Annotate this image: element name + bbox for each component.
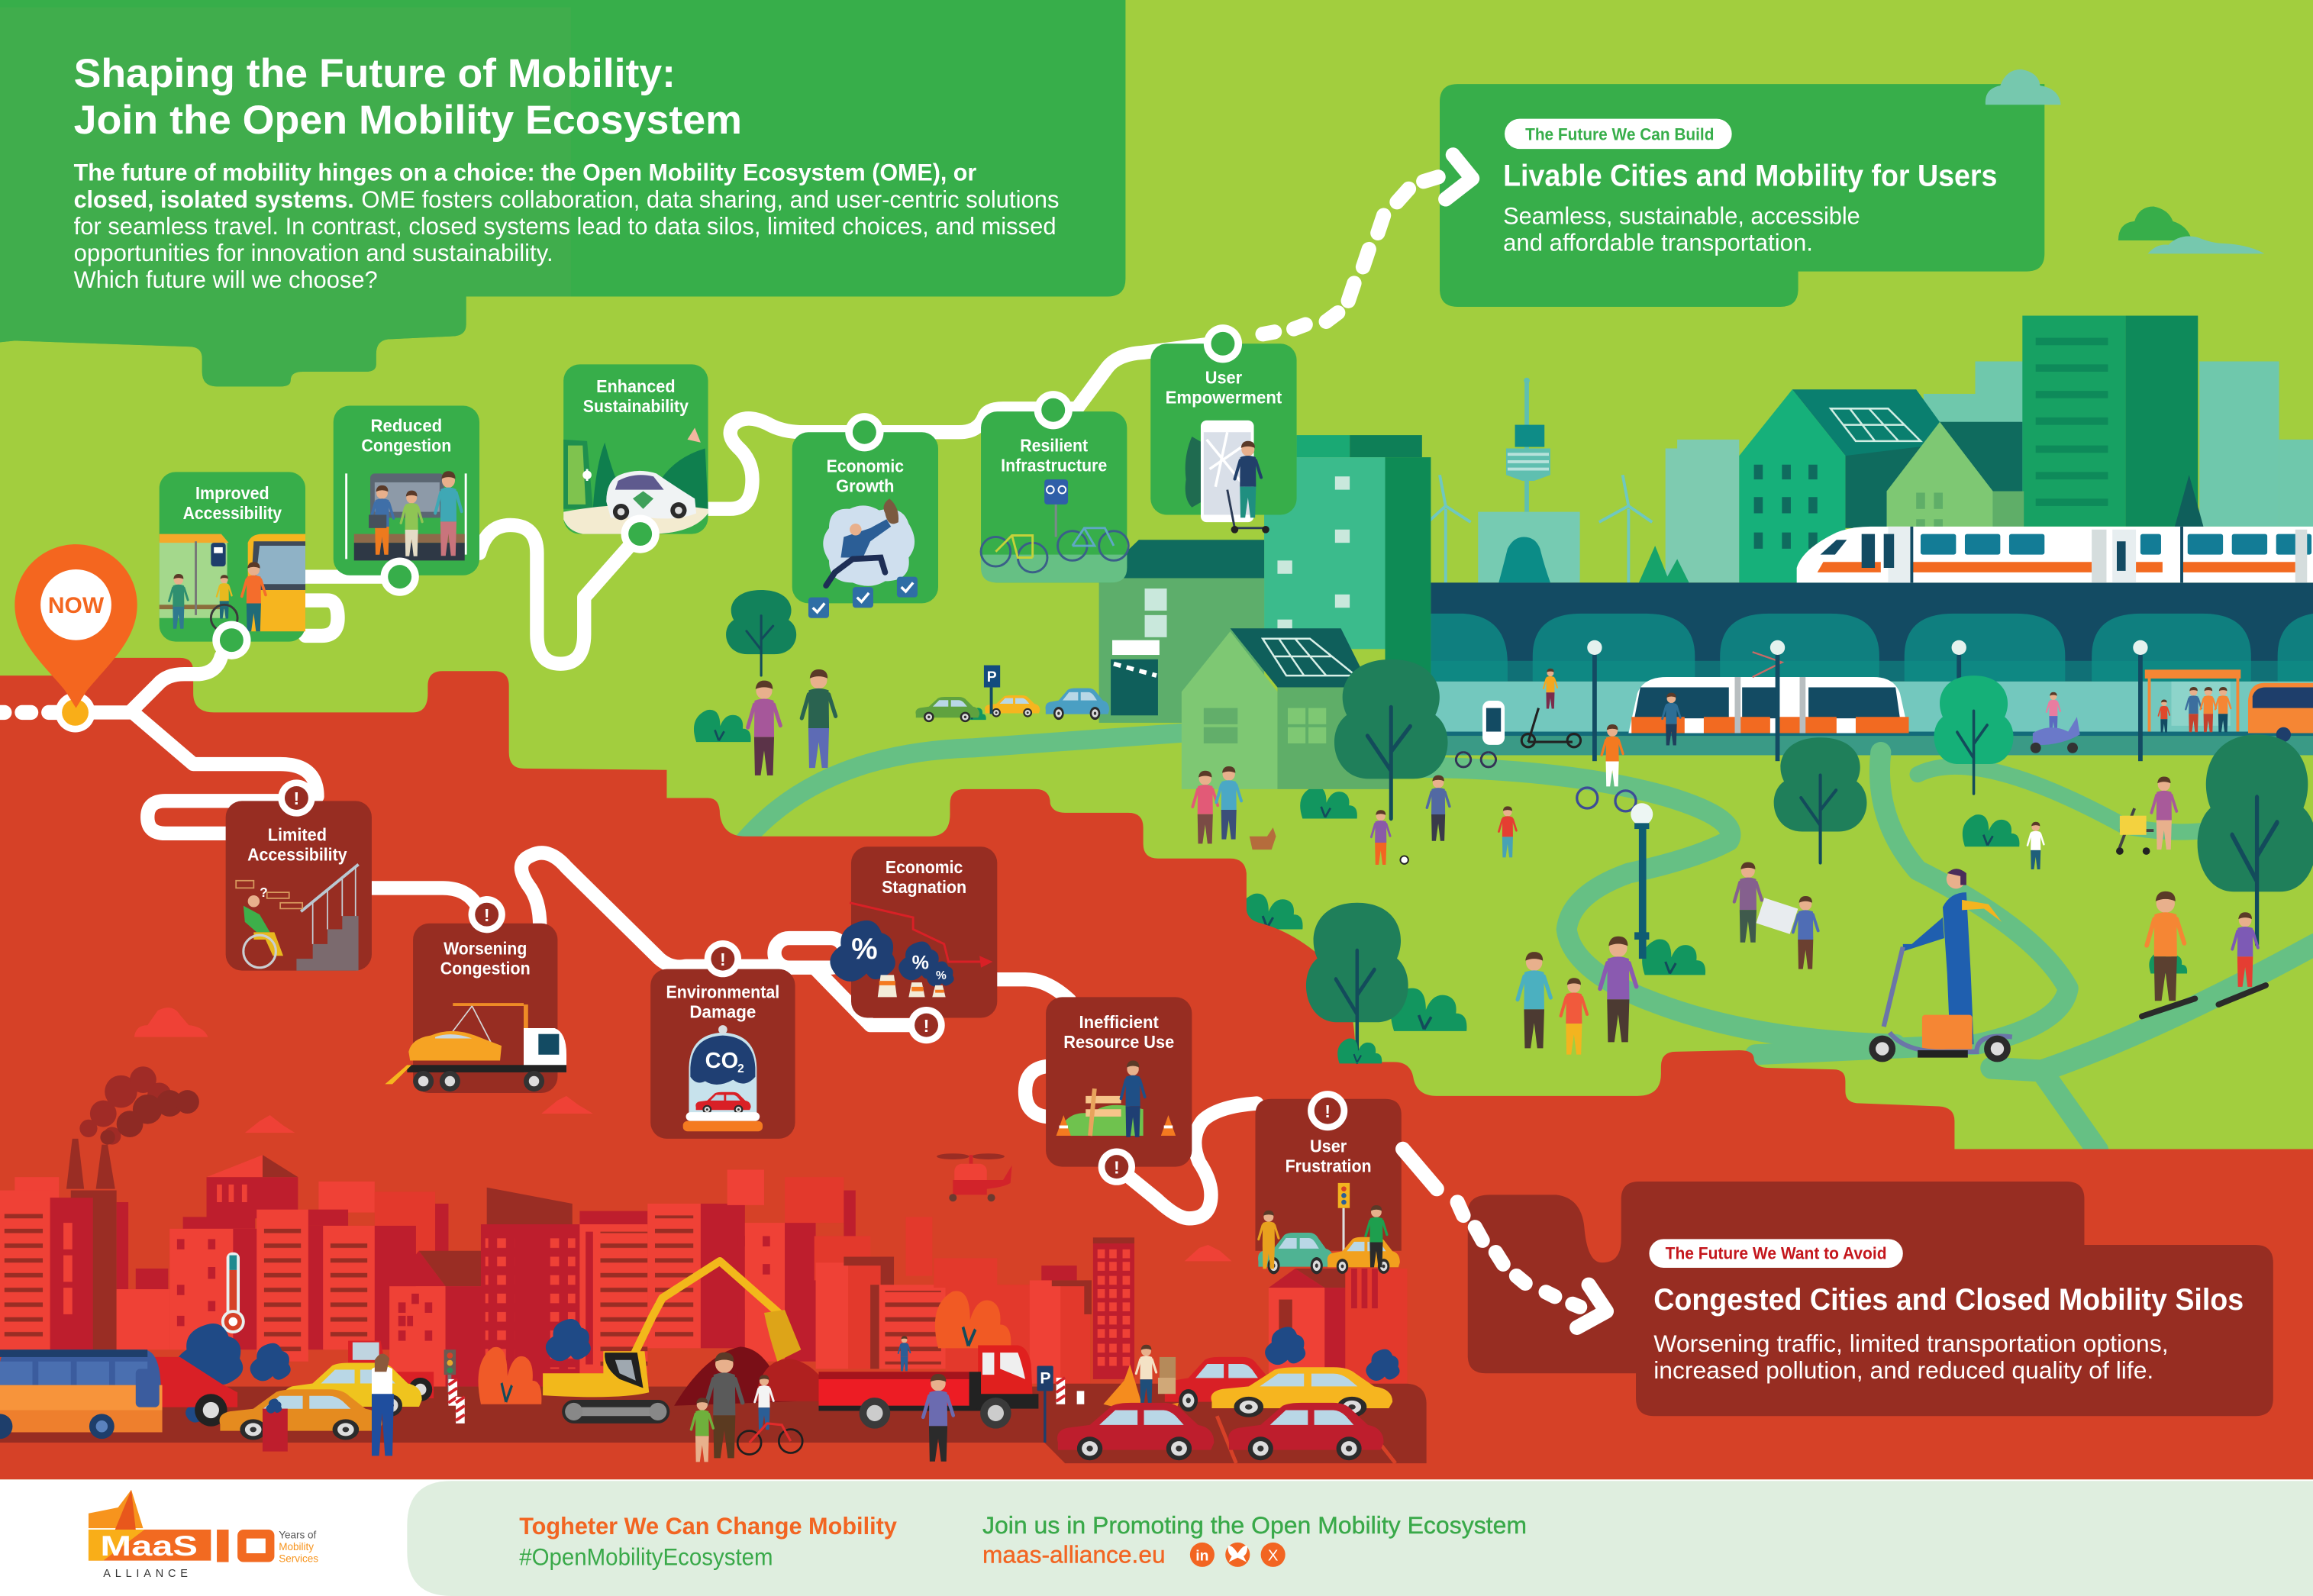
logo: MaaS Alliance 10 years: ALLIANCE	[103, 1568, 192, 1580]
intro paragraph: The future of mobility hinges on a choice: the Open Mobility Ecosystem (OME), or	[74, 159, 976, 186]
panel: User Empowerment: User	[1205, 367, 1242, 387]
panel: User Frustration: User	[1310, 1136, 1347, 1156]
panel: Economic Stagnation: %	[912, 953, 929, 974]
red future markers: !	[484, 905, 490, 925]
street tram	[1628, 652, 1909, 733]
intro paragraph: closed, isolated systems.	[74, 185, 354, 213]
panel: Environmental Damage: Environmental	[666, 982, 779, 1001]
panel: Environmental Damage	[650, 969, 795, 1139]
heading: Join the Open Mobility Ecosystem	[74, 98, 742, 143]
tree overlapping red edge	[1306, 903, 1408, 1063]
callout: future we can build: Seamless, sustainable, accessible	[1503, 202, 1860, 230]
panel: User Empowerment: Empowerment	[1166, 388, 1282, 408]
red future markers: !	[720, 950, 726, 969]
panel: Environmental Damage: Damage	[689, 1001, 756, 1021]
callout: future we want to avoid: Worsening traffic, limited transportation options,	[1653, 1330, 2169, 1357]
panel: Inefficient Resource Use	[1046, 997, 1192, 1167]
logo: MaaS Alliance 10 years	[89, 1490, 318, 1580]
panel: Worsening Congestion: Congestion	[440, 958, 531, 978]
panel: Enhanced Sustainability: Enhanced	[596, 376, 676, 396]
green future markers	[212, 324, 1242, 659]
main road, green future	[76, 342, 1223, 712]
NOW location pin	[15, 544, 137, 733]
logo: MaaS Alliance 10 years: Mobility	[279, 1541, 314, 1552]
parking sign and barricades	[1037, 1366, 1084, 1443]
callout: future we can build: and affordable transportation.	[1503, 229, 1813, 256]
panel: Improved Accessibility: Improved	[195, 483, 269, 503]
park people	[748, 669, 2266, 1055]
panel: Worsening Congestion: Worsening	[444, 938, 527, 958]
panel: Economic Growth: Economic	[827, 456, 904, 476]
dashed arrow to the future we want to avoid	[1403, 1149, 1606, 1327]
dashes left of NOW	[0, 708, 56, 716]
panel: Resilient Infrastructure: Infrastructure	[1001, 455, 1107, 475]
NOW location pin: NOW	[48, 593, 105, 618]
panel: Economic Stagnation	[830, 846, 997, 1017]
icon: social links	[1190, 1543, 1286, 1567]
parking sign and barricades: P	[1040, 1369, 1051, 1388]
park paths	[742, 733, 2313, 1150]
elevated train	[1797, 527, 2313, 582]
thermometer	[221, 1253, 245, 1333]
logo: MaaS Alliance 10 years: MaaS	[100, 1530, 198, 1562]
panel: Inefficient Resource Use: Resource Use	[1063, 1032, 1174, 1052]
street riders	[1456, 669, 2080, 811]
panel: User Frustration: Frustration	[1286, 1156, 1372, 1175]
traffic vehicles left	[0, 1324, 465, 1456]
panel: Reduced Congestion: Reduced	[371, 415, 442, 435]
panel: Improved Accessibility: Accessibility	[183, 503, 282, 523]
panel: Reduced Congestion: Congestion	[361, 435, 451, 455]
clouds around green callout	[1986, 69, 2264, 253]
red future markers: !	[1324, 1101, 1331, 1121]
intro paragraph: for seamless travel. In contrast, closed systems lead to data silos, limited choices, and missed	[74, 212, 1056, 240]
footer call to action: maas-alliance.eu	[982, 1541, 1166, 1569]
lamp posts along street	[1587, 640, 2148, 761]
intro paragraph	[74, 159, 1059, 293]
panel: Economic Growth: Growth	[836, 476, 895, 495]
green city skyline	[1428, 316, 2313, 582]
traffic cars right	[1057, 1327, 1400, 1460]
callout: future we want to avoid: Congested Cities and Closed Mobility Silos	[1653, 1283, 2244, 1317]
footer call to action	[982, 1511, 1527, 1569]
header green panel shape	[0, 0, 1125, 386]
dashed arrow to the future we can build	[1263, 155, 1473, 334]
logo: MaaS Alliance 10 years: Years of	[279, 1530, 317, 1541]
red future markers	[278, 779, 1347, 1185]
heading: Shaping the Future of Mobility:	[74, 51, 676, 96]
red future markers: !	[1114, 1157, 1120, 1177]
factory chimneys	[66, 1139, 115, 1189]
footer band	[0, 1479, 2313, 1596]
green apartment and houses	[1099, 435, 1431, 789]
car park barrier and cars: P	[987, 669, 997, 685]
panel: Worsening Congestion	[385, 924, 566, 1093]
panel: Reduced Congestion	[334, 405, 479, 576]
icon: social links: X	[1268, 1548, 1279, 1565]
panel: Limited Accessibility: Limited	[268, 825, 327, 845]
park trees and bushes	[694, 590, 2313, 1031]
viaduct with arches	[1431, 582, 2313, 755]
callout: future we can build: The Future We Can Build	[1525, 125, 1714, 144]
intro paragraph: OME fosters collaboration, data sharing, and user-centric solutions	[361, 185, 1059, 213]
red future markers: !	[294, 788, 299, 808]
footer call to action: Join us in Promoting the Open Mobility Ecosystem	[982, 1511, 1527, 1539]
main road, red future	[133, 712, 1257, 1218]
pedestrians on road	[691, 1353, 953, 1462]
intro paragraph: Which future will we choose?	[74, 266, 378, 293]
panel: Limited Accessibility: ?	[260, 885, 268, 900]
panel: Environmental Damage: 2	[737, 1062, 744, 1075]
footer tagline	[519, 1512, 897, 1570]
smog clouds and small clouds	[79, 1008, 1232, 1261]
panel: Resilient Infrastructure: Resilient	[1020, 435, 1089, 455]
heading	[74, 51, 742, 143]
footer tagline: #OpenMobilityEcosystem	[519, 1543, 773, 1570]
red city skyline	[0, 1155, 1408, 1387]
helicopter	[937, 1153, 1012, 1201]
car park barrier and cars	[915, 640, 1160, 722]
footer tagline: Togheter We Can Change Mobility	[519, 1512, 897, 1540]
panel: Economic Stagnation: %	[851, 933, 878, 966]
park lamp	[1631, 803, 1653, 959]
panel: Inefficient Resource Use: Inefficient	[1079, 1012, 1159, 1032]
panel: User Frustration	[1255, 1099, 1402, 1274]
panel: Limited Accessibility	[226, 801, 372, 971]
red lower territory	[0, 658, 2313, 1479]
bus shelter and bus	[2145, 669, 2313, 742]
man on electric scooter	[1869, 869, 2012, 1062]
road ground	[0, 1384, 1427, 1463]
callout: future we want to avoid: increased pollution, and reduced quality of life.	[1653, 1356, 2153, 1384]
panel: Economic Stagnation: Stagnation	[882, 877, 966, 897]
tree in front of houses	[1334, 659, 1448, 819]
red future markers: !	[924, 1016, 929, 1036]
panel: Economic Stagnation: Economic	[886, 857, 963, 877]
callout: future we want to avoid	[1468, 1182, 2273, 1416]
excavator, mound and truck	[478, 1261, 1038, 1429]
callout: future we can build	[1440, 84, 2044, 307]
panel: Environmental Damage: CO	[705, 1049, 738, 1073]
panel: User Empowerment	[1150, 343, 1297, 534]
callout: future we want to avoid: The Future We Want to Avoid	[1666, 1243, 1887, 1262]
panel: Improved Accessibility	[160, 472, 305, 642]
icon: social links: in	[1195, 1549, 1208, 1565]
panel: Economic Growth	[792, 432, 938, 618]
logo: MaaS Alliance 10 years: Services	[279, 1553, 318, 1565]
intro paragraph: opportunities for innovation and sustainability.	[74, 239, 553, 266]
panel: Economic Stagnation: %	[936, 969, 947, 982]
panel: Enhanced Sustainability	[563, 364, 708, 534]
panel: Limited Accessibility: Accessibility	[247, 845, 347, 865]
panel: Resilient Infrastructure	[981, 411, 1128, 582]
callout: future we can build: Livable Cities and Mobility for Users	[1503, 159, 1997, 192]
panel: Enhanced Sustainability: Sustainability	[583, 396, 689, 416]
